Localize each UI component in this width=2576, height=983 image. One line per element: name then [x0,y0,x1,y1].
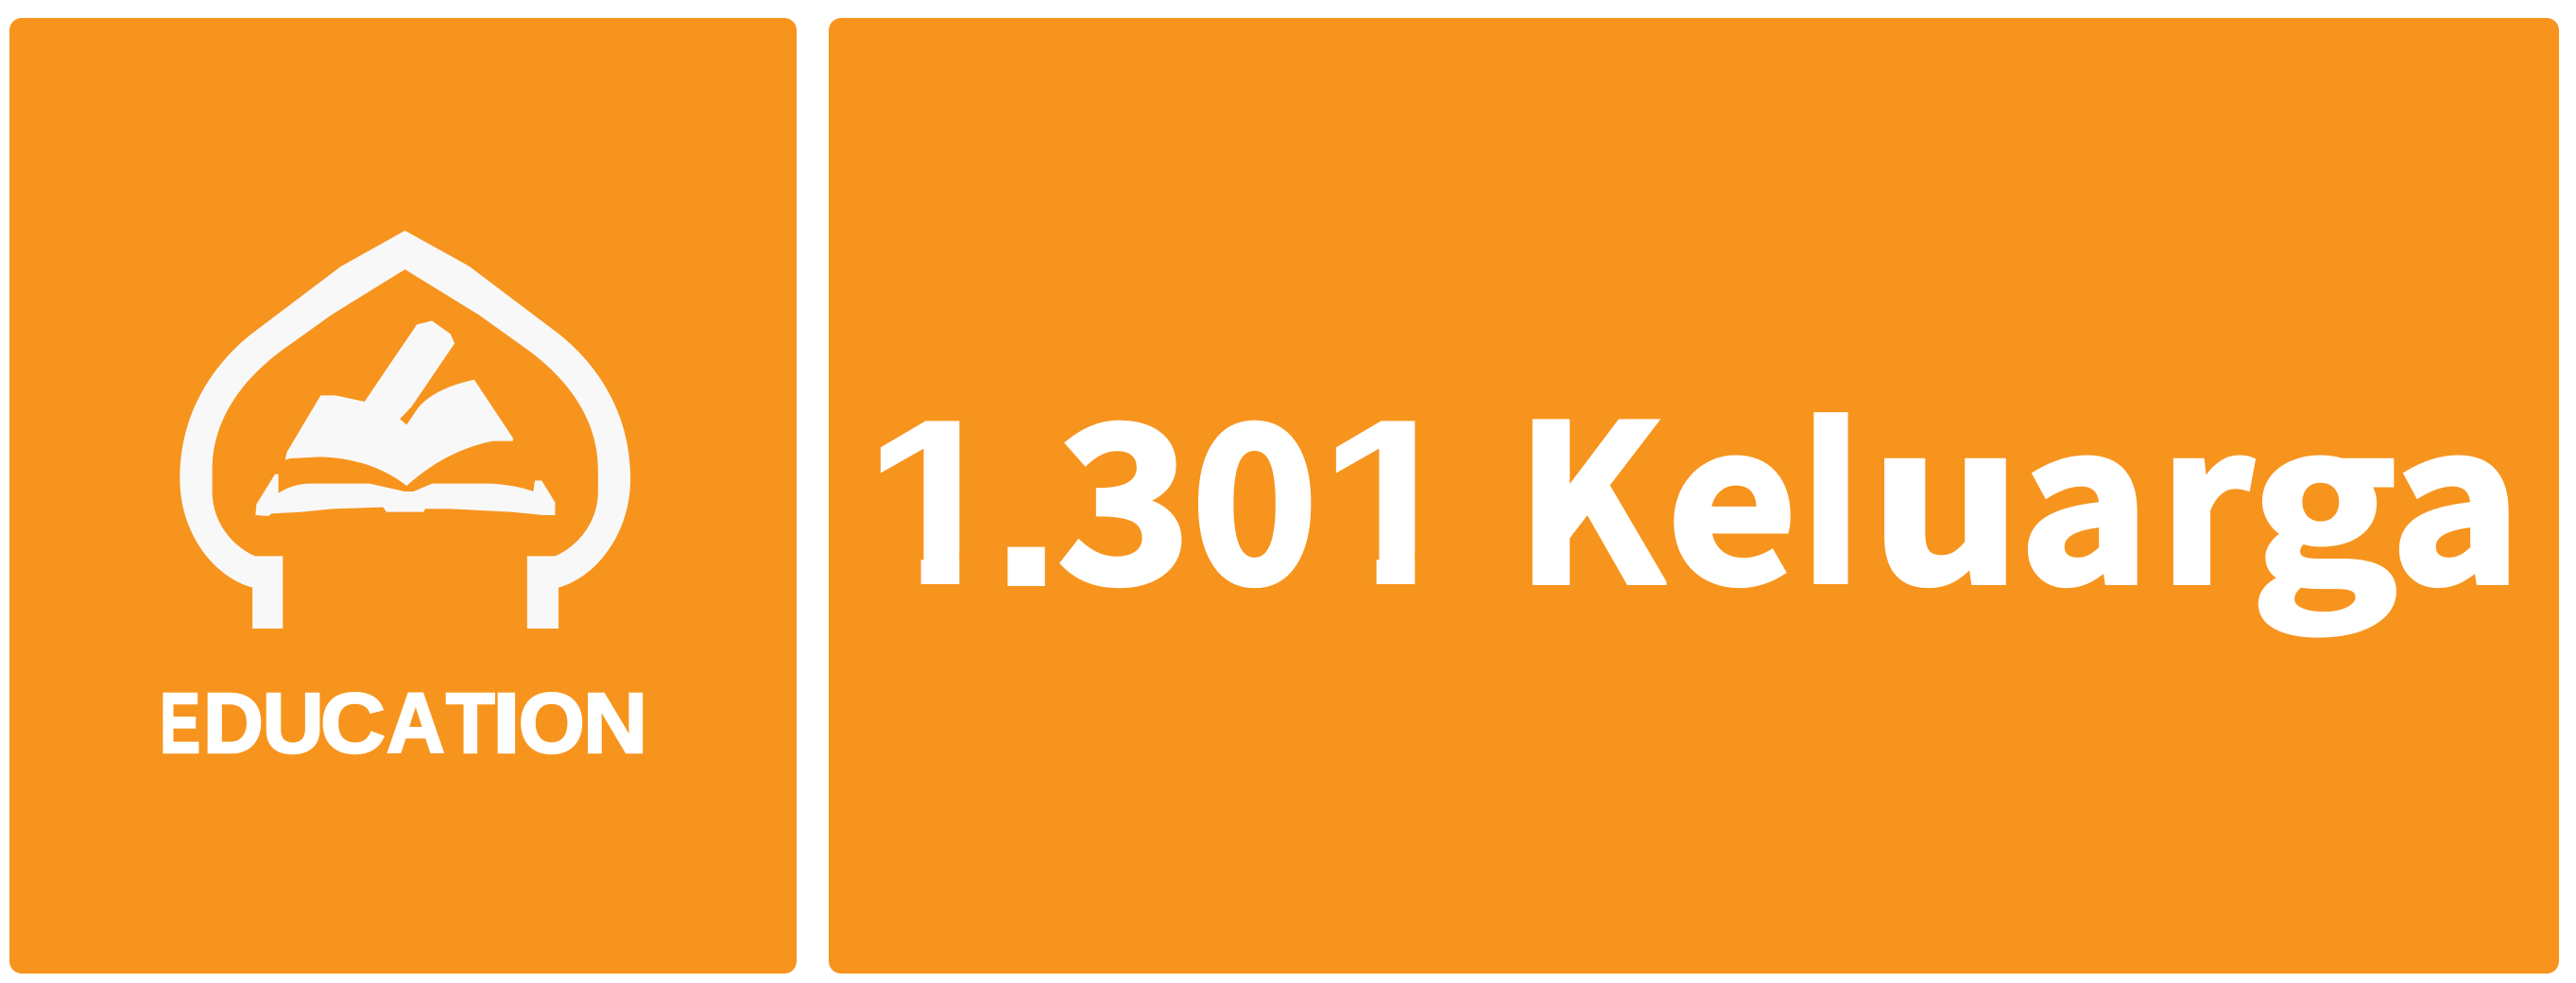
heading: EDUCATION [160,677,647,771]
text: u [1870,331,2021,645]
icon: pen and upper book pages [285,320,513,486]
icon: dome arch outline [180,231,630,629]
text: O [519,677,585,771]
text: A [386,677,445,771]
text: E [160,677,200,771]
panel: statistic value [829,18,2559,974]
text: T [446,677,495,771]
text: a [2391,331,2521,645]
text: g [2251,331,2397,645]
text: 1 [1318,371,1464,635]
text: 0 [1192,331,1318,645]
text: r [2159,331,2253,645]
text: . [993,371,1059,635]
text: K [1516,331,1662,645]
text: N [583,677,647,771]
text: D [202,677,263,771]
text: U [263,677,324,771]
text: C [320,677,386,771]
text: a [2019,331,2151,645]
text: 3 [1057,331,1191,645]
icon: lower book cover [255,474,555,516]
panel: education category [9,18,797,974]
text: 1 [862,371,1007,635]
text: l [1796,371,1865,635]
text: statistic value 1.301 Keluarga [881,331,2521,645]
text: e [1667,331,1796,645]
text: I [492,677,521,771]
